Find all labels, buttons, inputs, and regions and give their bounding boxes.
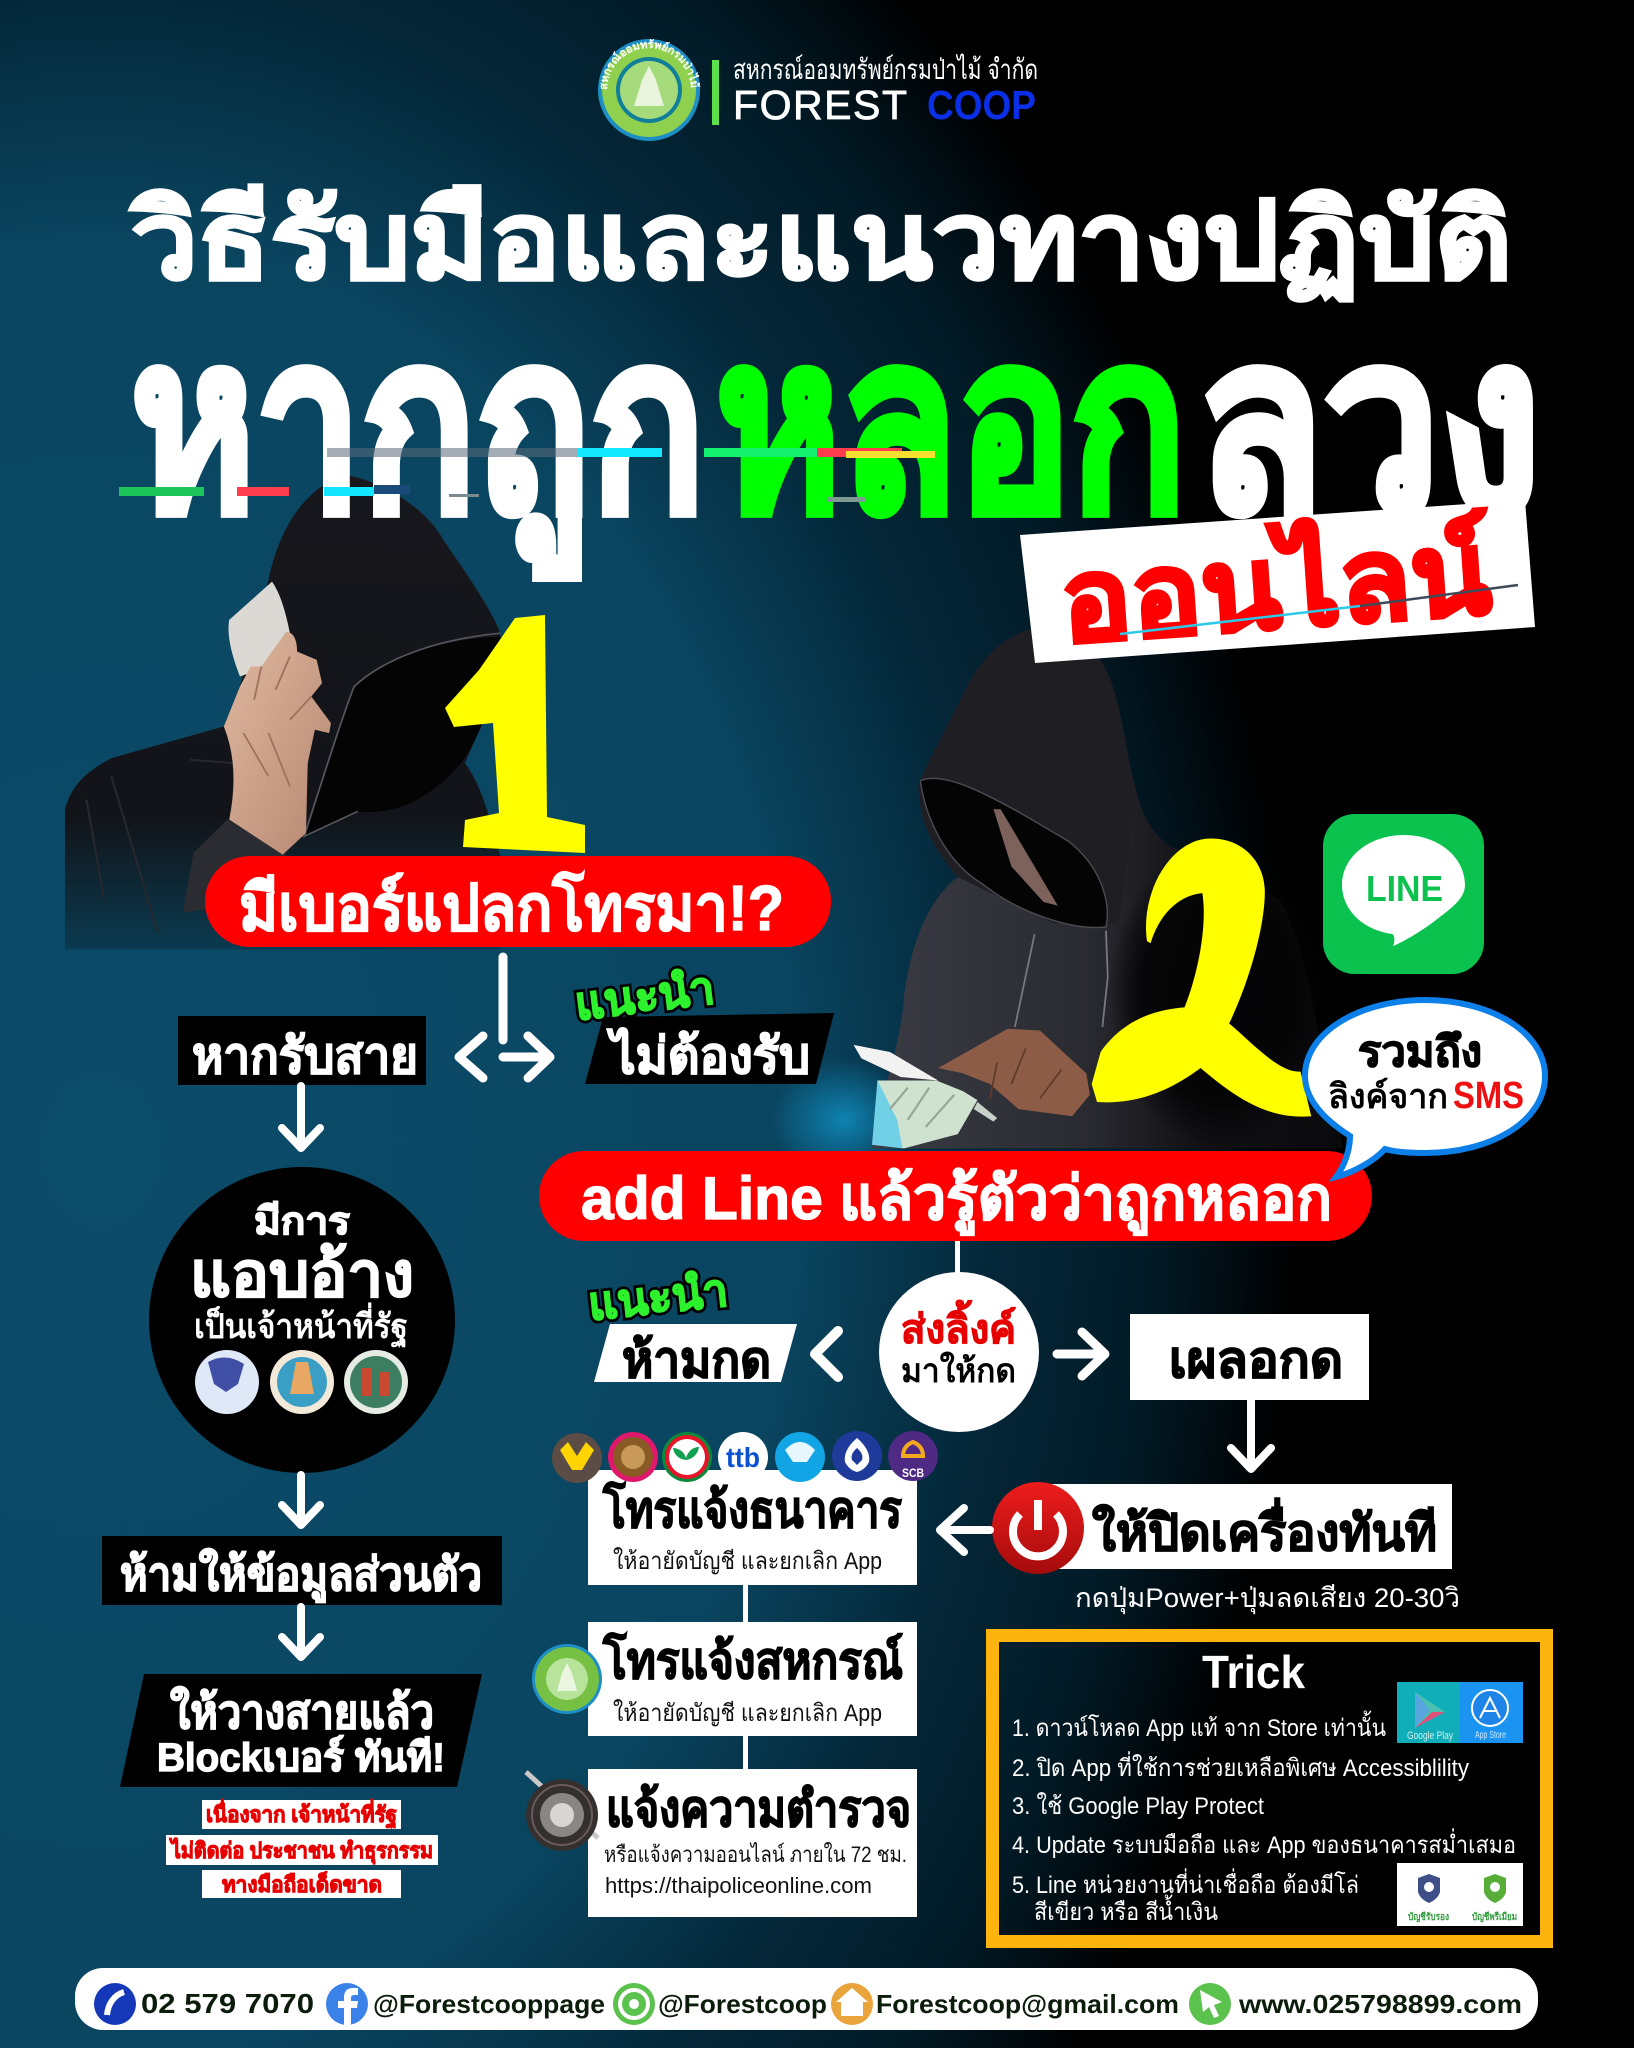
box: do not click: [594, 1324, 797, 1388]
icon: comptroller seal: [195, 1350, 259, 1414]
logo: Forest Coop header: สหกรณ์ออมทรัพย์กรมป่าไม้ จำกัด: [733, 54, 1038, 85]
speech tail over pill: [1336, 1136, 1385, 1177]
panel: report police: หรือแจ้งความออนไลน์ ภายใน 72 ชม.: [604, 1842, 907, 1867]
pill: strange number calling: มีเบอร์แปลกโทรมา!?: [239, 870, 784, 944]
icon: stores: Google Play: [1407, 1730, 1453, 1742]
panel: trick: 2. ปิด App ที่ใช้การช่วยเหลือพิเศษ Accessiblility: [1012, 1751, 1469, 1782]
logo: Forest Coop header: COOP: [927, 82, 1036, 128]
box: hang up and block: Blockเบอร์ ทันที!: [157, 1735, 445, 1780]
icon: coop seal: [598, 39, 700, 141]
box: accidentally clicked: [1130, 1314, 1369, 1400]
icon: KBank: [662, 1432, 712, 1482]
connector: [743, 1585, 748, 1622]
circle: impersonation: เป็นเจ้าหน้าที่รัฐ: [194, 1302, 408, 1349]
banner: online: ออนไลน์: [1057, 506, 1495, 667]
hint: power button: กดปุ่มPower+ปุ่มลดเสียง 20-30วิ: [1075, 1583, 1460, 1615]
icon: ttb: ttb: [726, 1442, 760, 1473]
box: do not give personal data: [102, 1536, 502, 1605]
bank logos: [552, 1431, 938, 1483]
panel: call coop: [532, 1622, 917, 1736]
label: recommended: แนะนำ: [586, 1264, 730, 1330]
note: officials never contact: [166, 1798, 438, 1898]
title line 2: หลอก: [716, 288, 1186, 563]
icon: Krungthai: [775, 1432, 825, 1482]
icon: stores: App Store: [1475, 1730, 1506, 1741]
circle: impersonation: [149, 1167, 455, 1473]
icon: LINE app: [1323, 814, 1484, 974]
box: do not click: ห้ามกด: [622, 1332, 771, 1388]
box: if answered: หากรับสาย: [192, 1028, 418, 1084]
label: recommended: แนะนำ: [572, 961, 717, 1030]
callout: includes SMS links: SMS: [1453, 1075, 1524, 1117]
icon: SCB: SCB: [902, 1466, 924, 1480]
icon: coop seal small: [532, 1644, 602, 1714]
logo: Forest Coop header: FOREST: [733, 82, 907, 128]
hand: [224, 632, 331, 855]
arrow: split: [459, 957, 550, 1078]
box: accidentally clicked: เผลอกด: [1169, 1332, 1343, 1388]
panel: trick: [992, 1636, 1546, 1942]
icon: police seal: [526, 1772, 598, 1851]
icon: stores: [1397, 1682, 1523, 1743]
figure: hooded man with smartphone: [772, 629, 1343, 1180]
box: do not answer: ไม่ต้องรับ: [606, 1027, 810, 1084]
panel: call bank: ให้อายัดบัญชี และยกเลิก App: [613, 1547, 882, 1575]
panel: trick: 5. Line หน่วยงานที่น่าเชื่อถือ ต้องมีโล่: [1012, 1868, 1359, 1899]
label: recommended: แนะนำ: [586, 1264, 730, 1330]
panel: report police: แจ้งความตำรวจ: [606, 1781, 911, 1837]
figure: hooded man with phone: [65, 475, 501, 950]
circle: link sent: มาให้กด: [901, 1351, 1016, 1389]
box: turn off immediately: [992, 1482, 1452, 1574]
arrow: down: [1231, 1400, 1271, 1469]
icon: line at: [613, 1983, 655, 2025]
box: do not answer: [585, 1013, 834, 1084]
callout: includes SMS links: [1305, 1000, 1545, 1177]
icon: LINE app: LINE: [1366, 868, 1443, 909]
icon: Bangkok Bank: [832, 1431, 882, 1481]
footer: contacts: @Forestcoop: [658, 1989, 827, 2019]
panel: call coop: โทรแจ้งสหกรณ์: [602, 1631, 903, 1689]
icon: home: [831, 1983, 873, 2025]
icon: shields: บัญชีรับรอง: [1408, 1911, 1449, 1923]
arrow: down: [282, 1607, 320, 1657]
icon: excise seal: [344, 1350, 408, 1414]
title line 2: [131, 288, 1541, 578]
icon: GSB: [608, 1432, 658, 1482]
title line 2: หากถูก: [131, 288, 705, 578]
note: officials never contact: เนื่องจาก เจ้าหน้าที่รัฐ: [206, 1798, 397, 1829]
icon: power: [992, 1482, 1084, 1574]
icon: facebook: [326, 1983, 368, 2025]
panel: trick: สีเขียว หรือ สีน้ำเงิน: [1034, 1894, 1218, 1926]
icon: shields: [1397, 1863, 1523, 1926]
circle: link sent: [879, 1272, 1039, 1432]
box: do not give personal data: ห้ามให้ข้อมูลส่วนตัว: [120, 1547, 482, 1603]
panel: trick: 3. ใช้ Google Play Protect: [1012, 1792, 1264, 1820]
callout: includes SMS links: รวมถึง: [1358, 1028, 1482, 1075]
hands: [938, 1029, 1090, 1116]
phone: [228, 582, 297, 676]
note: officials never contact: ทางมือถือเด็ดขาด: [222, 1870, 382, 1897]
note: officials never contact: ไม่ติดต่อ ประชาชน ทำธุรกรรม: [169, 1837, 433, 1865]
sleeve: [183, 820, 286, 913]
icon: SCB: [888, 1431, 938, 1481]
panel: trick: 4. Update ระบบมือถือ และ App ของธนาคารสม่ำเสมอ: [1012, 1828, 1516, 1859]
circle: impersonation: แอบอ้าง: [190, 1241, 414, 1310]
panel: trick: Trick: [1202, 1646, 1305, 1698]
logo: Forest Coop header: [598, 39, 1038, 141]
panel: trick: 1. ดาวน์โหลด App แท้ จาก Store เท่านั้น: [1012, 1710, 1386, 1742]
panel: report police: https://thaipoliceonline.com: [605, 1873, 872, 1898]
footer: contacts: 02 579 7070: [141, 1988, 314, 2019]
circle: link sent: ส่งลิ้งค์: [901, 1300, 1016, 1352]
title line 2: ลวง: [1197, 288, 1541, 563]
box: hang up and block: [120, 1674, 482, 1787]
arrow: left to bank: [940, 1508, 990, 1552]
icon: web cursor: [1189, 1983, 1231, 2025]
panel: call bank: [588, 1470, 917, 1585]
circle: impersonation: มีการ: [254, 1201, 351, 1243]
icon: phone: [94, 1983, 136, 2025]
footer: contacts: @Forestcooppage: [373, 1989, 605, 2019]
number 2: [1092, 838, 1311, 1117]
pill: add line: add Line แล้วรู้ตัวว่าถูกหลอก: [581, 1165, 1332, 1236]
panel: call bank: โทรแจ้งธนาคาร: [602, 1480, 902, 1538]
icon: ttb: [718, 1432, 768, 1482]
box: turn off immediately: ให้ปิดเครื่องทันที: [1092, 1498, 1437, 1561]
number 1: [445, 615, 585, 853]
icon: shields: บัญชีพรีเมียม: [1472, 1911, 1517, 1923]
arrow: down to circle: [282, 1086, 320, 1148]
pill: add line: [539, 1151, 1372, 1241]
icon: revenue seal: [270, 1350, 334, 1414]
label: recommended: แนะนำ: [572, 961, 717, 1030]
footer: contacts: www.025798899.com: [1238, 1989, 1522, 2019]
footer: contacts: [75, 1968, 1538, 2030]
panel: call coop: ให้อายัดบัญชี และยกเลิก App: [613, 1699, 882, 1727]
box: hang up and block: ให้วางสายแล้ว: [170, 1685, 434, 1738]
arrow: left chevron: [815, 1331, 838, 1377]
arrow: down: [282, 1475, 320, 1525]
callout: includes SMS links: ลิงค์จาก: [1328, 1077, 1448, 1116]
icon: Krungsri: [552, 1433, 602, 1483]
panel: report police: [526, 1769, 917, 1917]
title line 1: วิธีรับมือและแนวทางปฏิบัติ: [130, 180, 1512, 302]
footer: contacts: Forestcoop@gmail.com: [876, 1989, 1179, 2019]
arrow: right: [1057, 1332, 1105, 1376]
